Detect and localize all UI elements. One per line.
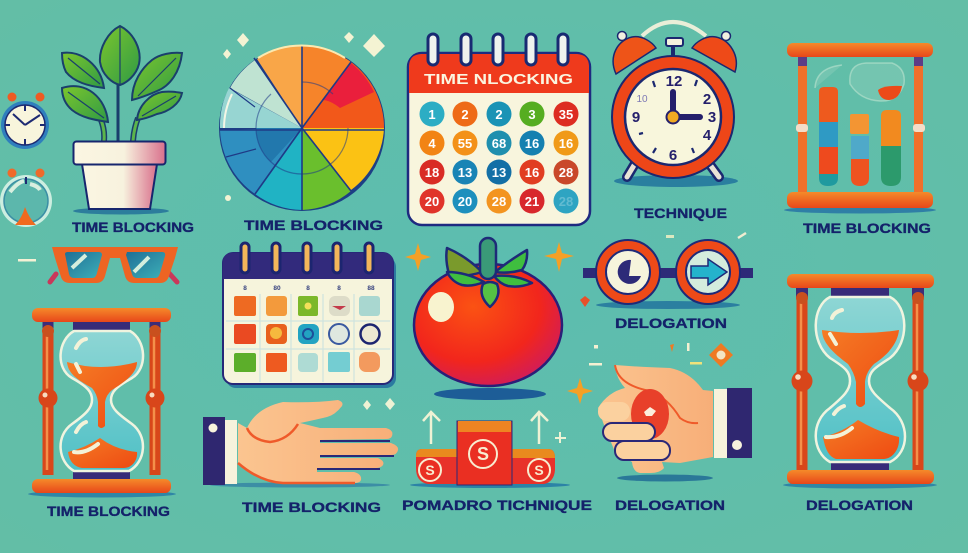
clock numerals: 6 xyxy=(669,147,677,164)
icon: small timer clock xyxy=(0,168,52,227)
date grid: 18 xyxy=(425,165,439,180)
date grid: 3 xyxy=(528,107,536,122)
decorative confetti xyxy=(580,233,746,367)
icon: closed fist with cuff xyxy=(598,365,752,482)
date grid: 2 xyxy=(461,107,469,122)
icon: small wall clock xyxy=(1,92,49,149)
upper right leaf xyxy=(132,53,182,100)
fingers xyxy=(598,402,670,460)
date grid: 28 xyxy=(559,194,573,209)
label: delegation hourglass: DELOGATION xyxy=(806,498,913,513)
label: time blocking plant: TIME BLOCKING xyxy=(72,220,194,235)
date grid: 13 xyxy=(492,165,506,180)
date grid: 21 xyxy=(525,194,539,209)
clock numerals: 2 xyxy=(703,91,711,108)
label: time blocking hand: TIME BLOCKING xyxy=(242,500,381,515)
date grid: 20 xyxy=(425,194,439,209)
date grid: 35 xyxy=(559,107,573,122)
icon: podium with coins xyxy=(410,421,570,488)
icon: orange glasses xyxy=(50,247,178,283)
weekday marks: 88 xyxy=(367,285,375,292)
date grid: 1 xyxy=(428,107,436,122)
icon: open hand with cuff xyxy=(203,400,398,488)
date grid: 4 xyxy=(428,136,436,151)
decorative sparkles around tomato xyxy=(405,242,574,272)
date grid: 28 xyxy=(559,165,573,180)
label: time blocking frame: TIME BLOCKING xyxy=(803,221,931,236)
label: delegation fist: DELOGATION xyxy=(615,498,725,513)
date grid: 16 xyxy=(559,136,573,151)
calendar: task grid xyxy=(223,243,396,388)
weekday marks: 8 xyxy=(306,285,310,292)
sparkles above podium xyxy=(363,398,395,410)
clock numerals: 10 xyxy=(636,94,648,105)
calendar title: TIME NLOCKING xyxy=(424,72,573,88)
date grid: 68 xyxy=(492,136,506,151)
coin symbols xyxy=(425,444,544,478)
lower left leaf xyxy=(62,86,108,122)
lower right leaf xyxy=(137,92,182,120)
tube two xyxy=(850,114,869,186)
label: pomadro technique: POMADRO TICHNIQUE xyxy=(402,498,592,513)
decorative sparkles around wheel xyxy=(223,32,385,201)
date grid: 28 xyxy=(492,194,506,209)
coin symbols: S xyxy=(425,462,435,478)
weekday marks xyxy=(243,285,375,292)
icon: alarm clock xyxy=(612,22,738,187)
arrows up xyxy=(423,412,566,444)
upper left leaf xyxy=(62,53,104,88)
calendar: main numbered xyxy=(408,34,590,225)
coin symbols: S xyxy=(477,444,489,464)
date grid: 2 xyxy=(495,107,503,122)
coins xyxy=(419,440,550,481)
label: technique: TECHNIQUE xyxy=(634,206,727,221)
decorative dash xyxy=(18,259,36,262)
date grid: 55 xyxy=(458,136,472,151)
clock numerals: 9 xyxy=(632,109,640,126)
weekday marks: 8 xyxy=(337,285,341,292)
weekday marks: 80 xyxy=(273,285,281,292)
tomato leaves xyxy=(446,248,532,307)
tube one xyxy=(819,87,838,186)
glass bubbles xyxy=(815,63,904,101)
icon: frame with colour tubes xyxy=(784,43,936,214)
label: delegation glasses: DELOGATION xyxy=(615,316,727,331)
icon: potted plant xyxy=(62,26,182,214)
tube three xyxy=(881,110,901,186)
icon: left hourglass xyxy=(28,308,176,498)
coin symbols: S xyxy=(534,462,544,478)
clock numerals xyxy=(632,73,716,164)
date grid xyxy=(420,102,578,214)
sparkle near fist xyxy=(567,378,593,404)
clock numerals: 4 xyxy=(703,127,712,144)
weekday marks: 8 xyxy=(243,285,247,292)
chart: colour wheel xyxy=(219,45,385,211)
icon: right hourglass xyxy=(783,274,937,488)
date grid: 20 xyxy=(458,194,472,209)
icon: tomato xyxy=(414,238,562,400)
icon: delegation glasses xyxy=(583,240,753,309)
label: time blocking hourglass: TIME BLOCKING xyxy=(47,504,170,519)
date grid: 13 xyxy=(458,165,472,180)
date grid: 16 xyxy=(525,136,539,151)
label: time blocking wheel: TIME BLOCKING xyxy=(244,218,383,233)
clock numerals: 12 xyxy=(666,73,682,90)
date grid: 16 xyxy=(525,165,539,180)
center leaf xyxy=(100,26,140,85)
task tiles xyxy=(234,296,380,372)
clock numerals: 3 xyxy=(708,109,716,126)
